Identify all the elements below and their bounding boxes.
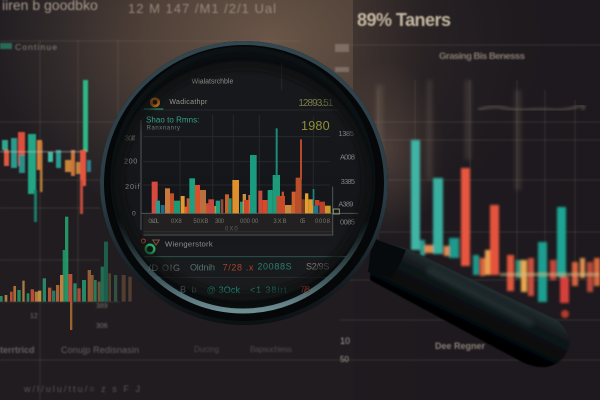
lens yellow value: 1980 — [301, 119, 330, 133]
background side labels near the lens — [335, 44, 349, 72]
lens y-axis labels: 200 — [124, 157, 137, 166]
background column labels — [0, 341, 485, 355]
lens stats row two — [180, 284, 310, 295]
lens x-axis labels: 0&0L — [148, 219, 160, 225]
lens chart axes — [141, 120, 358, 235]
background handwritten notes: w/l/ulu/ttu/= z s F J — [23, 384, 140, 394]
lens y-axis labels: 0 — [132, 211, 136, 218]
background column labels: terrtricd — [0, 345, 35, 355]
lens x-axis labels: 0X0 — [225, 227, 238, 233]
lens lower icon — [141, 239, 159, 253]
lens chart reflection — [143, 214, 333, 234]
lens stats row two: <1 38irt — [250, 285, 287, 295]
background faded column ghosts — [376, 80, 521, 190]
lens dashboard content — [124, 63, 358, 295]
lens edge vignette — [119, 65, 367, 297]
lens x-axis labels: 3XB — [273, 219, 287, 225]
lens widget title: Wadicathpr — [169, 99, 208, 106]
lens y-axis labels — [124, 134, 141, 218]
lens x-axis labels — [148, 219, 331, 233]
handle — [368, 238, 569, 367]
lens subheading: Ranxnanry — [147, 126, 180, 132]
lens stats row one: 7/28 .x — [223, 263, 254, 273]
lens teal heading: Shao to Rmns: — [146, 115, 199, 124]
lens right labels: 0085 — [340, 218, 355, 227]
lens stats row one: /D OIG — [148, 263, 180, 273]
lens x-axis labels: 300 — [215, 219, 225, 225]
lens x-axis labels: 0X8 — [171, 219, 182, 225]
background column labels: Bapsuchiess — [250, 345, 292, 354]
handle grip — [370, 238, 569, 367]
background big percentage heading: 89% Taners — [357, 10, 451, 30]
lens lower title: Wiengerstork — [165, 240, 213, 249]
lens top label: Wialatsrchble — [192, 78, 233, 85]
lens right labels — [338, 129, 355, 227]
lens top value: 12893.51 — [298, 98, 334, 109]
lens x-axis labels: 50XB — [193, 219, 208, 225]
handle collar joint — [368, 238, 406, 278]
lens stats row two: @ 3Ock — [207, 285, 240, 295]
background stray tick labels: 306 — [96, 323, 108, 330]
lens right labels: 1385 — [338, 129, 354, 138]
background left lower bar chart — [0, 217, 132, 330]
background vertical axis — [355, 88, 357, 400]
background column labels: Ducing — [194, 345, 219, 354]
lens stats row one: 20088S — [257, 262, 292, 272]
lens grid — [142, 63, 347, 277]
lens stats row one — [148, 262, 329, 273]
background stray tick labels — [30, 303, 350, 364]
background stray tick labels: 50 — [340, 355, 349, 364]
lens outer frame — [100, 41, 388, 325]
background stray tick labels: 12 — [30, 313, 38, 320]
lens x-axis labels: 05 — [300, 219, 306, 225]
handle highlight — [430, 271, 530, 323]
lens outer rim highlight — [102, 43, 386, 323]
background left label: Continue — [15, 42, 57, 52]
lens stats row two: Bb — [180, 284, 197, 294]
lens small marker — [333, 209, 339, 214]
background subheading: Grasing Bis Benesss — [439, 51, 525, 62]
lens right labels: 3385 — [341, 177, 355, 186]
lens y-axis labels: 30if — [125, 134, 136, 143]
magnifying glass — [100, 41, 388, 325]
lens stats row two: 7/8 — [300, 284, 310, 294]
background stray tick labels: 389 — [96, 303, 108, 310]
background column labels: Conujp Redisnasin — [61, 345, 139, 355]
lens y-axis labels: 20if — [125, 182, 141, 191]
background column labels: Dee Regner — [435, 341, 485, 351]
background top-centre figures: 12 M 147 /M1 /2/1 Ual — [128, 1, 276, 16]
lens divider — [145, 255, 347, 258]
lens stats row one: S2/9S — [306, 262, 329, 272]
background right bar chart — [411, 140, 600, 318]
lens right labels: A008 — [340, 152, 355, 161]
lens stats row one: Oldnih — [190, 262, 215, 272]
lens bar chart — [152, 128, 331, 213]
lens x-axis labels: 000 00 — [240, 219, 259, 225]
background left candlestick chart — [0, 80, 91, 222]
background right sparkline — [478, 106, 584, 110]
lens x-axis labels: 0008 — [315, 219, 331, 225]
lens right labels: A389 — [338, 200, 353, 209]
lens orange icon — [144, 97, 163, 109]
lens inner lip — [113, 49, 373, 311]
background stray tick labels: 10 — [340, 336, 350, 346]
lens glass screen — [116, 62, 370, 300]
